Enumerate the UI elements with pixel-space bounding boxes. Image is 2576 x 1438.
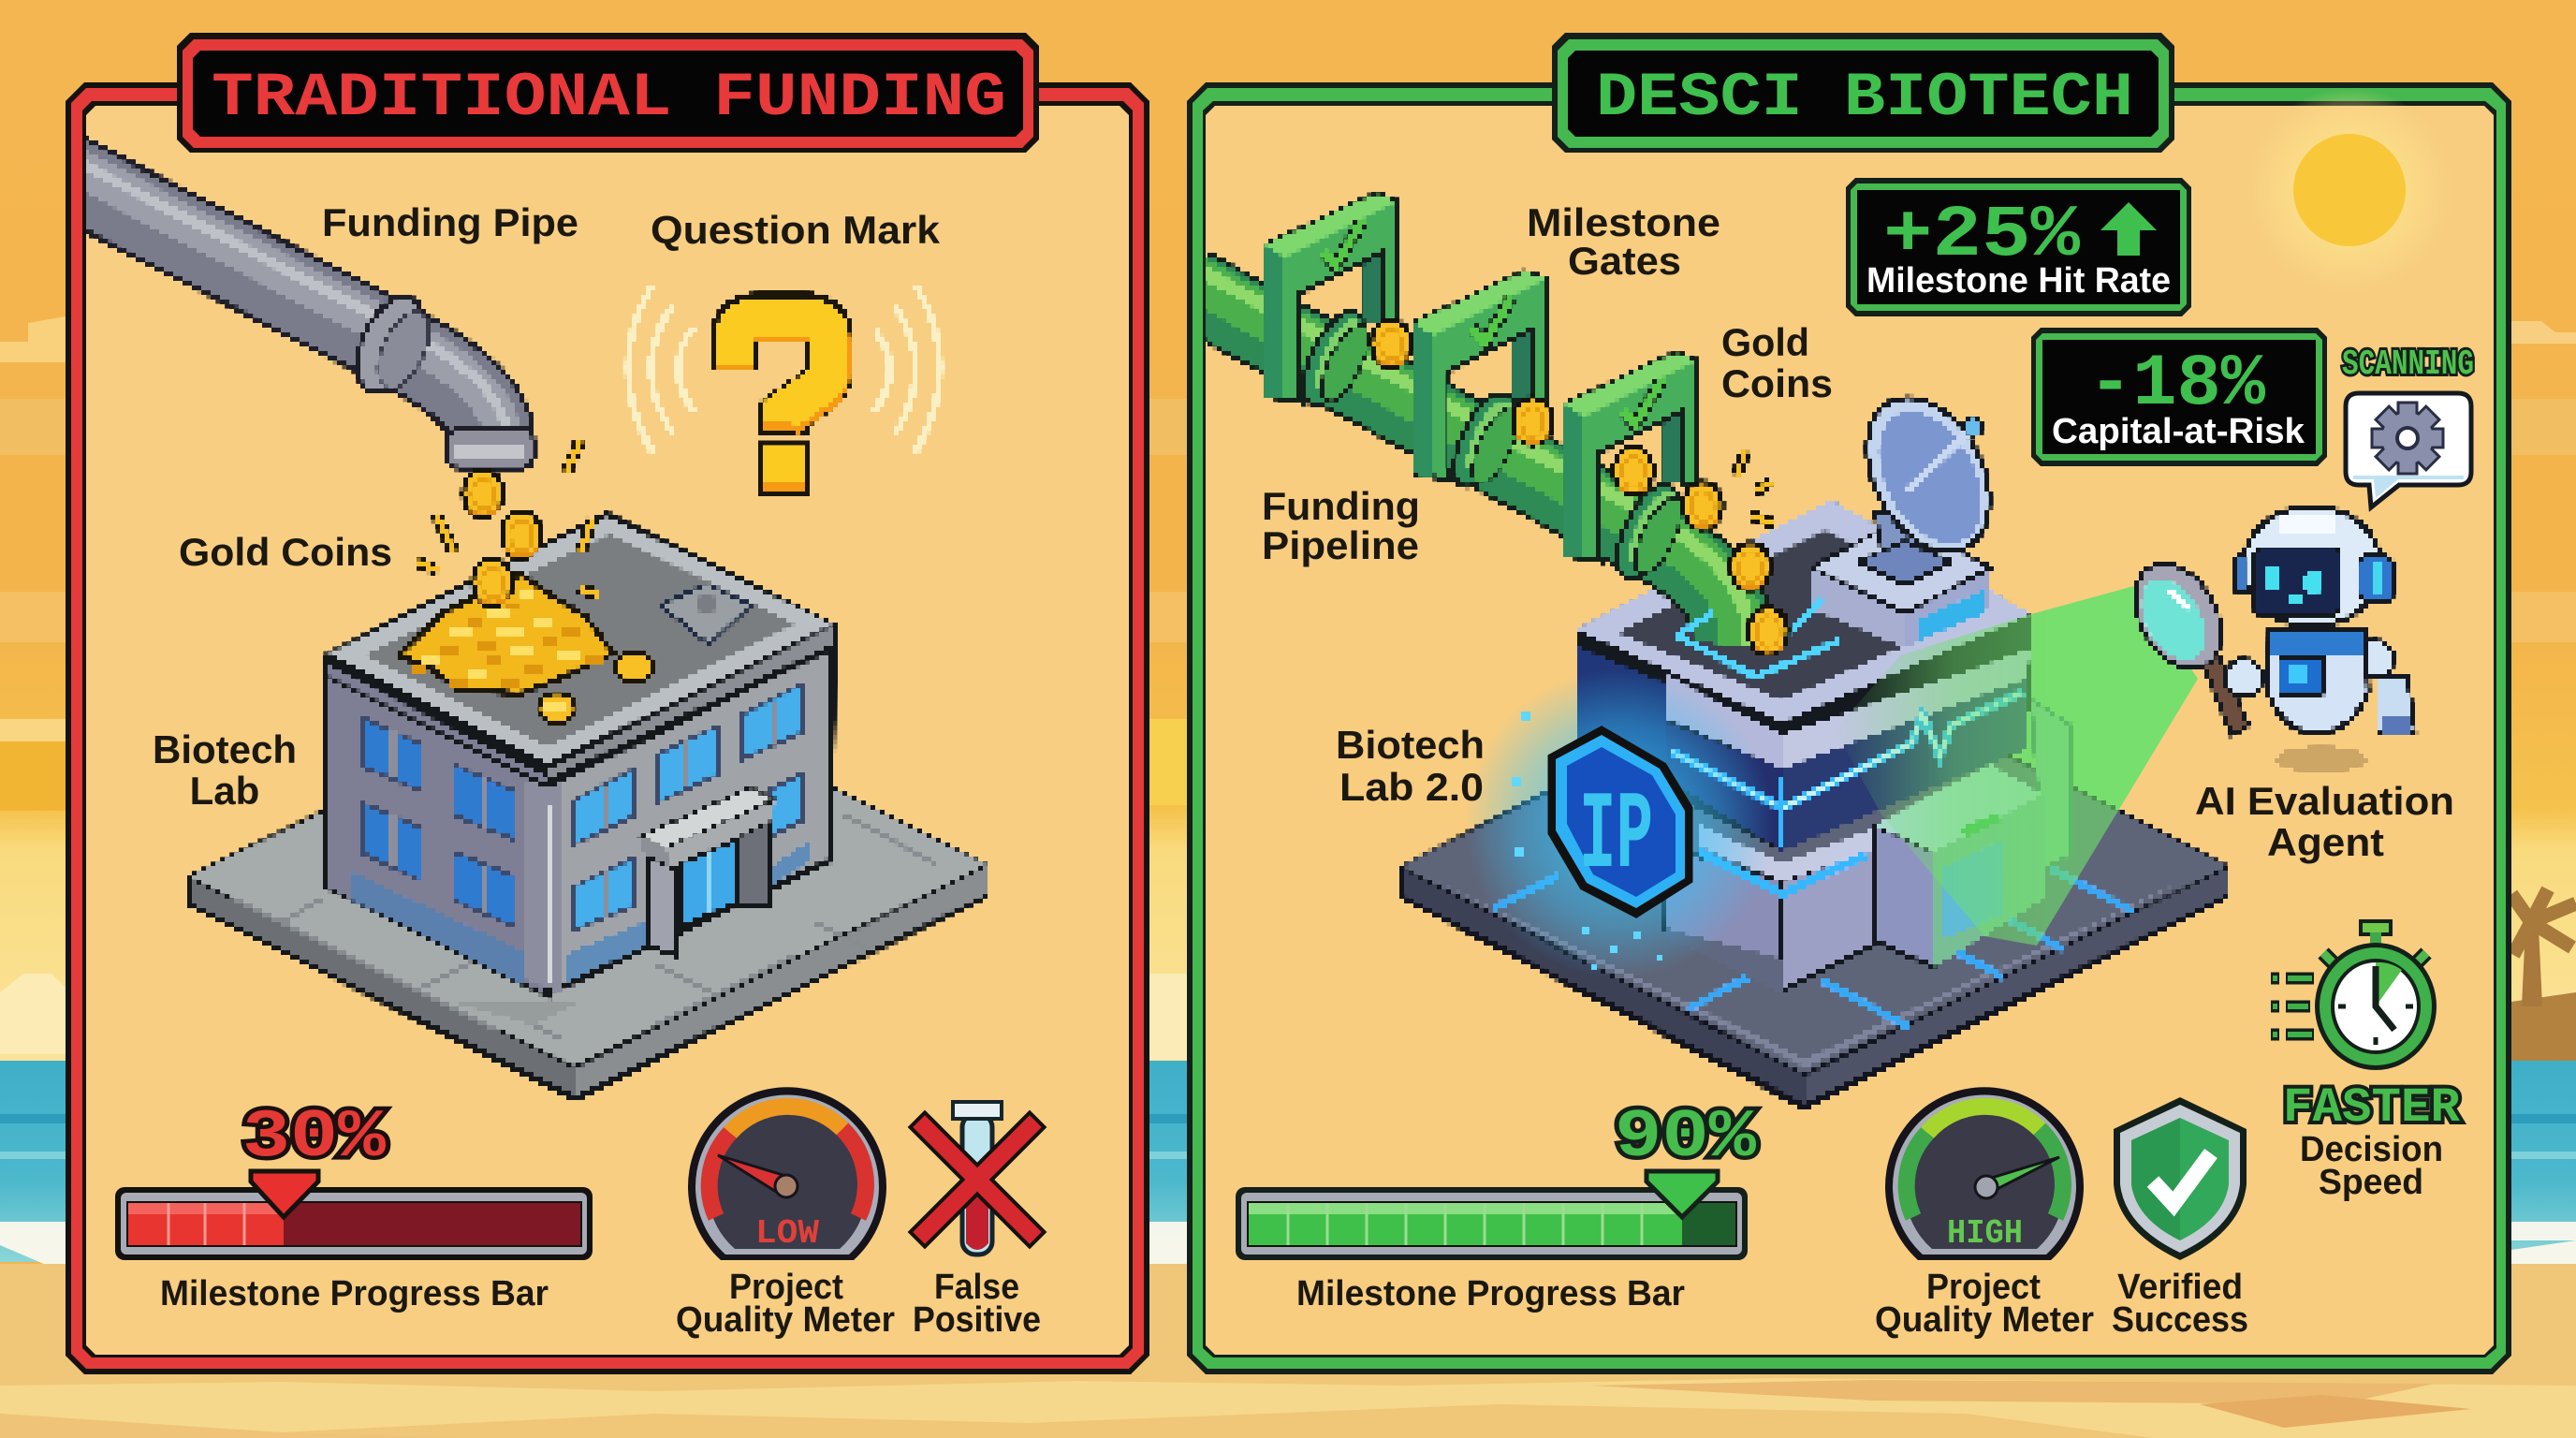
milestone progress bar: 30 percent	[115, 1171, 593, 1260]
label: project quality meter: Project	[729, 1268, 843, 1307]
platform	[187, 671, 989, 1102]
label: faster: FASTER	[2283, 1080, 2461, 1136]
label: false positive: False	[934, 1268, 1019, 1307]
label: funding pipeline: Pipeline	[1262, 523, 1419, 567]
label: verified success: Success	[2112, 1300, 2248, 1340]
label: verified success: Verified	[2117, 1268, 2243, 1307]
value: 30 percent: 30%	[242, 1099, 387, 1176]
sun	[2247, 87, 2452, 293]
label: milestone progress bar: Milestone Progress Bar	[1296, 1274, 1685, 1313]
icon: stopwatch	[2271, 921, 2437, 1070]
label: gold coins: Gold	[1721, 320, 1809, 364]
panel: traditional funding	[37, 33, 1149, 1374]
label: biotech lab: Lab	[190, 769, 259, 813]
label: biotech lab: Biotech	[153, 727, 297, 771]
label: ai evaluation agent: Agent	[2267, 820, 2384, 864]
beam: ai scan cone	[1900, 586, 2198, 946]
metric: capital at risk: Capital-at-Risk	[2052, 412, 2305, 451]
annex door block	[1874, 700, 2071, 967]
dark platform	[1398, 655, 2230, 1110]
label: milestone progress bar: Milestone Progress Bar	[160, 1274, 549, 1313]
beam tint over building	[1835, 586, 2198, 946]
value: 90 percent: 90%	[1615, 1099, 1757, 1176]
roof	[325, 511, 836, 789]
gauge: project quality high	[1885, 1087, 2084, 1260]
label: funding pipeline: Funding	[1262, 484, 1420, 528]
panel frame: green	[1187, 82, 2511, 1374]
icon: funding pipe	[37, 145, 534, 468]
windows	[363, 683, 803, 930]
illustration: biotech lab 2.0 building	[1398, 374, 2230, 1110]
label: biotech lab 2.0: Biotech	[1336, 723, 1485, 767]
title: traditional funding	[177, 33, 1039, 153]
dish stand and satellite	[1811, 374, 2017, 648]
gauge: project quality high: HIGH	[1947, 1214, 2023, 1253]
label: question mark: Question Mark	[651, 208, 941, 252]
metric: capital at risk	[2031, 328, 2327, 466]
metric: milestone hit rate: +25%	[1883, 195, 2080, 277]
label: scanning: SCANNING	[2342, 345, 2474, 385]
metric: capital at risk: -18%	[2088, 344, 2265, 426]
title: desci biotech: DESCI BIOTECH	[1596, 63, 2133, 133]
label: project quality meter: Quality Meter	[676, 1300, 895, 1340]
panel frame: red	[66, 82, 1149, 1374]
icon: question mark with waves	[628, 285, 940, 494]
metric: milestone hit rate: Milestone Hit Rate	[1866, 261, 2171, 301]
icon: gold coins on pipeline	[1371, 320, 1788, 654]
title: traditional funding: TRADITIONAL FUNDING	[212, 63, 1006, 133]
label: biotech lab 2.0: Lab 2.0	[1339, 765, 1484, 809]
label: gold coins: Gold Coins	[179, 530, 392, 574]
coin pile	[399, 574, 653, 723]
icon: falling gold coins	[417, 440, 599, 606]
label: gold coins: Coins	[1721, 361, 1833, 405]
label: ai evaluation agent: AI Evaluation	[2195, 779, 2454, 823]
label: decision speed: Decision	[2300, 1130, 2443, 1169]
gauge: project quality low: LOW	[755, 1214, 819, 1253]
icon: verified shield	[2114, 1097, 2247, 1260]
icon: ip badge	[1465, 669, 1774, 978]
walls	[328, 646, 833, 994]
milestone progress bar: 90 percent	[1236, 1171, 1748, 1260]
label: decision speed: Speed	[2319, 1163, 2423, 1202]
label: false positive: Positive	[913, 1300, 1041, 1340]
icon: funding pipeline with gates	[1189, 194, 1839, 677]
label: project quality meter: Quality Meter	[1875, 1300, 2094, 1340]
icon: false positive test tube	[925, 1102, 1030, 1255]
label: milestone gates: Gates	[1568, 239, 1681, 283]
label: milestone gates: Milestone	[1527, 200, 1720, 244]
metric: milestone hit rate	[1846, 178, 2191, 316]
icon: ai evaluation robot with magnifier	[2115, 506, 2415, 772]
icon: speech bubble with gear	[2346, 393, 2471, 507]
label: project quality meter: Project	[1926, 1268, 2041, 1307]
panel: desci biotech	[1187, 33, 2511, 1374]
label: funding pipe: Funding Pipe	[322, 200, 578, 244]
building tiers	[1576, 500, 2031, 994]
entrance door	[641, 787, 775, 956]
icon: ip badge: IP	[1579, 775, 1653, 900]
title: desci biotech	[1552, 33, 2174, 153]
illustration: biotech lab building	[187, 511, 989, 1102]
gauge: project quality low	[688, 1087, 886, 1260]
